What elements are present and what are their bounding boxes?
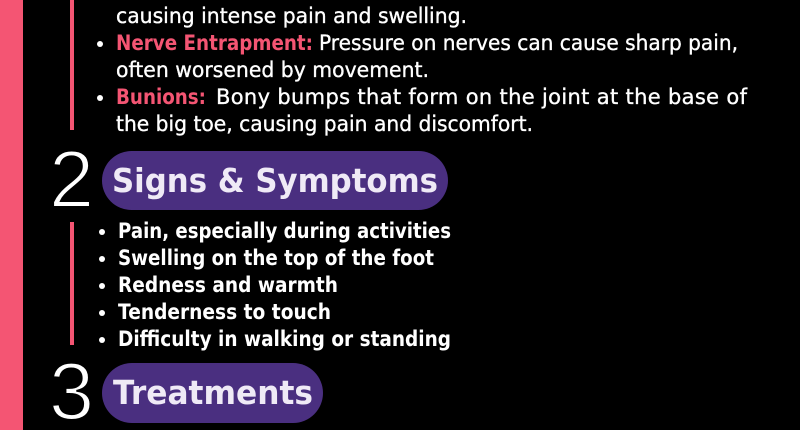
label: bunions: Bunions:	[116, 85, 206, 109]
left accent band	[0, 0, 23, 430]
text: nerve entrapment description: Pressure on nerves can cause sharp pain,	[319, 31, 738, 55]
section 2 symptoms list	[99, 219, 451, 351]
label: nerve entrapment: Nerve Entrapment:	[116, 31, 313, 55]
text: pain: Pain, especially during activities	[118, 219, 451, 243]
bullet: bunions	[97, 95, 103, 101]
number 2: 2	[49, 135, 94, 225]
text: bunions description: Bony bumps that form on the joint at the base of	[216, 85, 748, 109]
section 2 connector line	[70, 222, 74, 345]
text: bunions continuation: the big toe, causing pain and discomfort.	[116, 112, 533, 136]
bullet: tenderness	[99, 310, 105, 316]
bullet: nerve entrapment	[97, 41, 103, 47]
section 1 connector line	[70, 0, 74, 130]
heading: treatments: Treatments	[113, 373, 313, 412]
section 1 causes list	[97, 4, 748, 136]
heading: signs and symptoms: Signs & Symptoms	[112, 161, 438, 200]
bullet: redness	[99, 283, 105, 289]
bullet: swelling	[99, 256, 105, 262]
text: swelling line: causing intense pain and swelling.	[116, 4, 467, 28]
text: tenderness: Tenderness to touch	[118, 300, 331, 324]
text: swelling: Swelling on the top of the foot	[118, 246, 434, 270]
text: difficulty: Difficulty in walking or standing	[118, 327, 451, 351]
bullet: difficulty	[99, 337, 105, 343]
text: nerve entrapment continuation: often worsened by movement.	[116, 58, 429, 82]
bullet: pain	[99, 229, 105, 235]
text: redness: Redness and warmth	[118, 273, 338, 297]
heading: signs and symptoms	[102, 151, 448, 210]
heading: treatments	[102, 363, 323, 423]
